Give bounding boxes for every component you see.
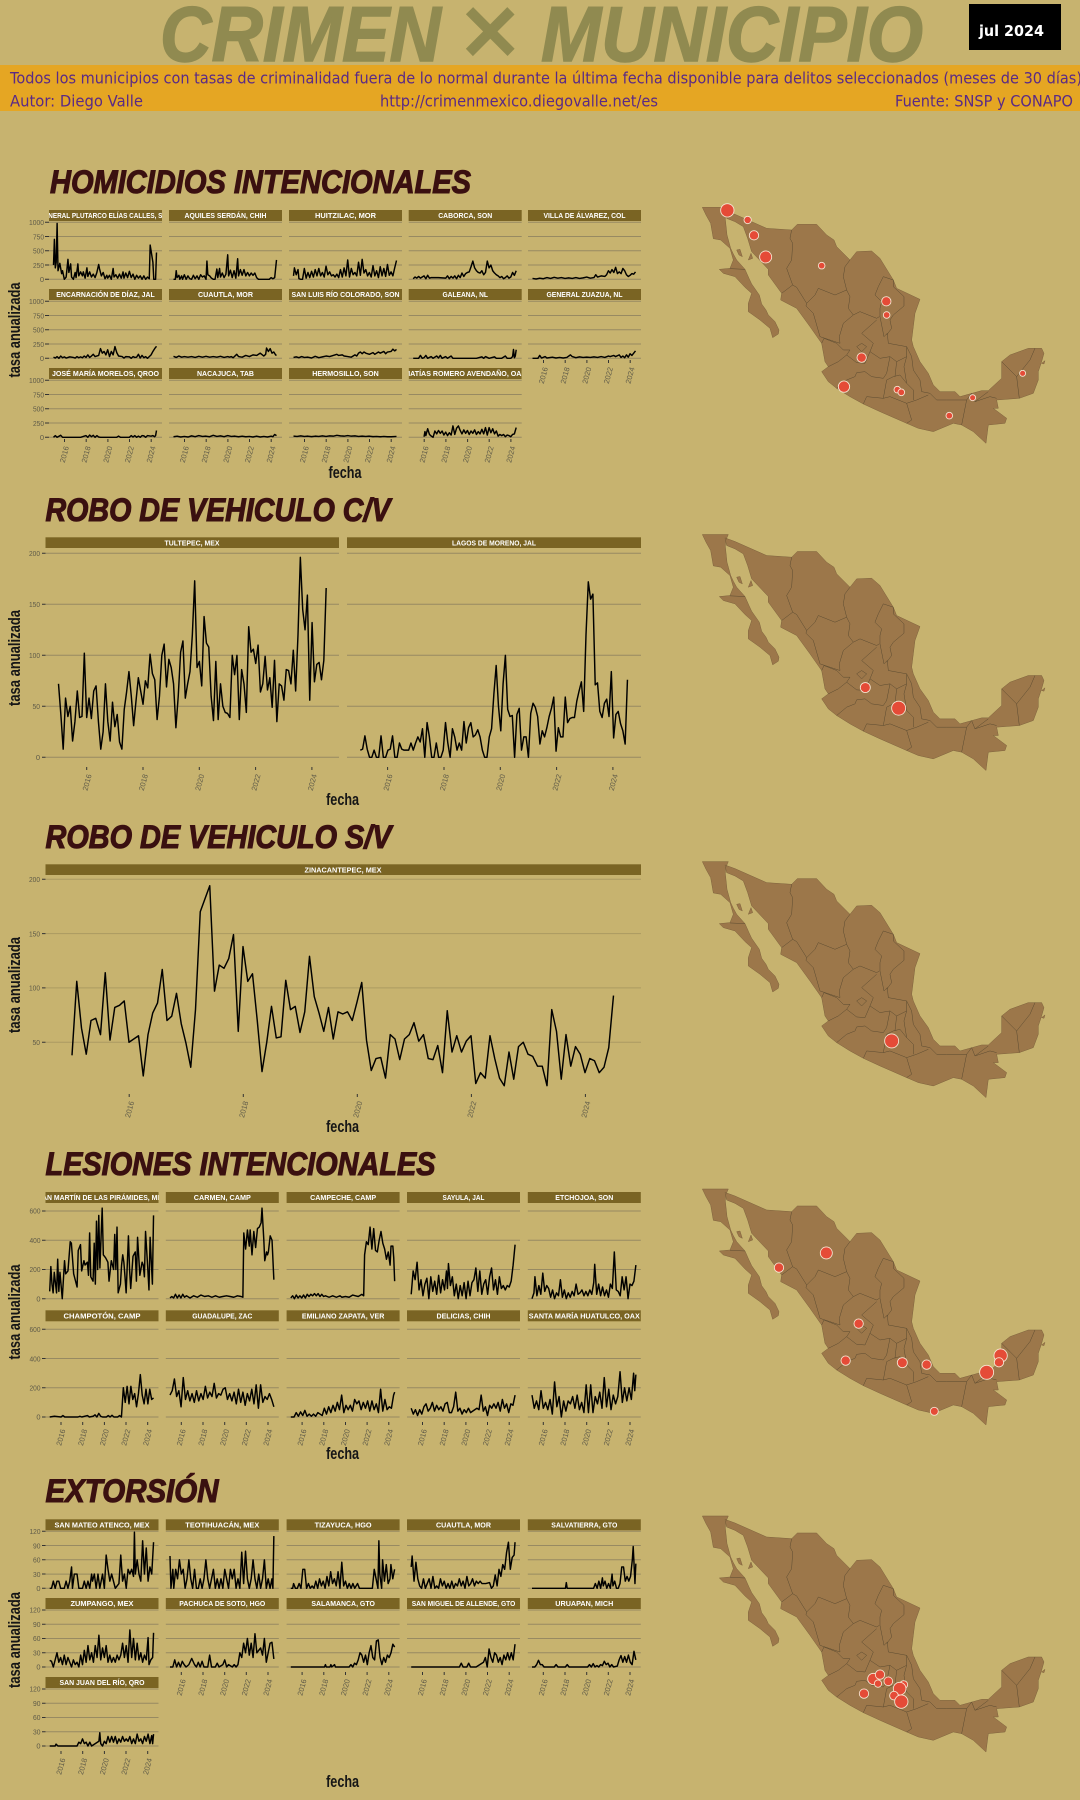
markers: [774, 1247, 1007, 1415]
panel: Galeana: [409, 289, 522, 358]
y axis title: tasa anualizada: [5, 610, 24, 706]
panel: San Luis Río Colorado: [289, 289, 402, 358]
panel: Lagos de Moreno: LAGOS DE MORENO, JAL: [452, 538, 536, 548]
y axis: 150: [29, 600, 40, 609]
panel: Guadalupe: [166, 1310, 279, 1417]
panel: Pachuca de Soto: PACHUCA DE SOTO, HGO: [179, 1599, 265, 1608]
panel: Cuautla extorsión: [407, 1519, 520, 1588]
panel: Zumpango: ZUMPANGO, MEX: [70, 1599, 134, 1608]
panel: Emiliano Zapata: [287, 1310, 400, 1417]
url: http://crimenmexico.diegovalle.net/es: [380, 92, 658, 110]
y axes: [30, 1527, 46, 1751]
panel: San Juan del Río: SAN JUAN DEL RÍO, QRO: [60, 1678, 145, 1687]
x axes: 2022: [250, 773, 263, 792]
x axis: 2024: [579, 1100, 592, 1119]
x axes: [54, 1672, 636, 1776]
date badge: [969, 4, 1061, 50]
panel: Zumpango: [46, 1598, 158, 1667]
x axis title: fecha: [326, 1444, 359, 1463]
panel: Villa de Álvarez: VILLA DE ÁLVAREZ, COL: [544, 211, 626, 220]
title: [160, 0, 923, 87]
panel: Villa de Álvarez: [528, 210, 641, 279]
y axis: 50: [32, 1038, 40, 1047]
panel: San Mateo Atenco: [46, 1519, 158, 1588]
line: [72, 886, 614, 1086]
y axis title: tasa anualizada: [5, 282, 24, 378]
panel: San Mateo Atenco: SAN MATEO ATENCO, MEX: [54, 1520, 150, 1529]
panel: Encarnación de Díaz: ENCARNACIÓN DE DÍAZ, JAL: [56, 290, 155, 299]
x axis: 2020: [351, 1100, 364, 1119]
map: extorsion: [702, 1516, 1045, 1752]
x axis title: fecha: [326, 1772, 359, 1791]
x axis: 2016: [123, 1100, 136, 1119]
section: homicidios: [5, 164, 641, 482]
panel: Zinacantepec: ZINACANTEPEC, MEX: [304, 866, 382, 874]
panel: Salvatierra: SALVATIERRA, GTO: [551, 1520, 617, 1529]
x axes: 2018: [137, 773, 150, 792]
heading: ROBO DE VEHICULO S/V: [46, 819, 394, 855]
panel: Hermosillo: HERMOSILLO, SON: [312, 369, 379, 378]
markers: [721, 204, 1026, 419]
panel: Champotón: [46, 1310, 158, 1417]
y axis title: tasa anualizada: [5, 1592, 24, 1688]
y axis title: tasa anualizada: [5, 937, 24, 1033]
x axes: 2020: [494, 773, 507, 792]
panel: Aquiles Serdán: AQUILES SERDÁN, CHIH: [184, 211, 266, 220]
heading: ROBO DE VEHICULO C/V: [46, 492, 393, 528]
panel: Campeche: [287, 1192, 400, 1299]
x axis title: fecha: [328, 463, 362, 482]
panel: San Luis Río Colorado: SAN LUIS RÍO COLORADO, SON: [292, 290, 400, 299]
panel: Delicias: DELICIAS, CHIH: [436, 1311, 490, 1320]
panel: San Miguel de Allende: [407, 1598, 520, 1667]
y axis: 200: [29, 875, 40, 884]
panel: General Plutarco Elías Calles: [39, 210, 172, 279]
panel: San Martín de las Pirámides: [38, 1192, 166, 1299]
y axes: [30, 1207, 46, 1422]
x axis: 2022: [465, 1100, 478, 1119]
heading: HOMICIDIOS INTENCIONALES: [50, 164, 472, 200]
panel: Tultepec: TULTEPEC, MEX: [164, 538, 220, 548]
panel: Delicias: [407, 1310, 520, 1417]
panel: Sayula: [407, 1192, 520, 1299]
panel: Uruapan: [528, 1598, 641, 1667]
author: Autor: Diego Valle: [10, 92, 143, 110]
x axes: 2022: [551, 773, 564, 792]
panel: Zinacantepec: [46, 864, 641, 1086]
section: lesiones: [5, 1146, 641, 1463]
y axis: 200: [29, 549, 40, 558]
x axes: [58, 360, 637, 464]
panel: Carmen: [166, 1192, 279, 1299]
panel: Caborca: CABORCA, SON: [438, 211, 492, 220]
heading: EXTORSIÓN: [46, 1473, 219, 1509]
y axis: [29, 875, 46, 1047]
panel: Nacajuca: NACAJUCA, TAB: [197, 369, 255, 378]
panel: Tizayuca: [287, 1519, 400, 1588]
marker: [885, 1034, 899, 1048]
date badge: jul 2024: [978, 22, 1044, 40]
panel: Cuautla homicidios: [169, 289, 282, 358]
y axis: [29, 549, 46, 762]
map: homicidios: [702, 204, 1045, 443]
panel: Matías Romero Avendaño: [404, 368, 526, 437]
header band: [0, 65, 1080, 111]
y axis: 100: [29, 984, 40, 993]
panel: Lagos de Moreno: [347, 537, 641, 757]
panel: Teotihuacán: [166, 1519, 279, 1588]
x axes: [81, 767, 620, 792]
y axis: 50: [32, 702, 40, 711]
markers: [859, 1670, 908, 1708]
panel: Tultepec: [46, 537, 339, 757]
x axis: [123, 1094, 592, 1119]
y axis: 150: [29, 929, 40, 938]
panel: General Zuazua: GENERAL ZUAZUA, NL: [546, 290, 623, 299]
panel: Pachuca de Soto: [166, 1598, 279, 1667]
panel: Huitzilac: HUITZILAC, MOR: [315, 211, 377, 220]
panel: Etchojoa: [528, 1192, 641, 1299]
panel: Salvatierra: [528, 1519, 641, 1588]
panel: San Miguel de Allende: SAN MIGUEL DE ALLENDE, GTO: [412, 1599, 515, 1608]
section: robo de vehiculo c/v: [5, 492, 641, 809]
x axes: 2020: [193, 773, 206, 792]
panel: Santa María Huatulco: [528, 1310, 641, 1417]
x axes: 2016: [81, 773, 94, 792]
x axis title: fecha: [326, 1117, 359, 1136]
section: robo de vehiculo s/v: [5, 819, 641, 1136]
panel: José María Morelos: [49, 368, 162, 437]
panel: José María Morelos: JOSÉ MARÍA MORELOS, QROO: [52, 369, 159, 378]
line: [58, 557, 326, 749]
panel: Campeche: CAMPECHE, CAMP: [310, 1193, 376, 1202]
panel: Uruapan: URUAPAN, MICH: [555, 1599, 613, 1608]
panel: Teotihuacán: TEOTIHUACÁN, MEX: [185, 1520, 259, 1529]
map: robo c/v: [702, 535, 1045, 771]
panel: Aquiles Serdán: [169, 210, 282, 279]
y axis: 100: [29, 651, 40, 660]
panel: San Juan del Río: [46, 1677, 158, 1746]
panel: Santa María Huatulco: SANTA MARÍA HUATULCO, OAX: [529, 1311, 640, 1320]
panel: Etchojoa: ETCHOJOA, SON: [555, 1193, 613, 1202]
panel: Caborca: [409, 210, 522, 279]
panel: Cuautla homicidios: CUAUTLA, MOR: [198, 290, 254, 299]
panel: Salamanca: SALAMANCA, GTO: [311, 1599, 375, 1608]
heading: LESIONES INTENCIONALES: [46, 1146, 436, 1182]
panel: Champotón: CHAMPOTÓN, CAMP: [64, 1311, 140, 1320]
x axes: 2018: [438, 773, 451, 792]
y axis: 0: [36, 753, 40, 762]
panel: Galeana: GALEANA, NL: [442, 290, 488, 299]
map: robo s/v: [702, 862, 1045, 1098]
x axes: [54, 1422, 636, 1447]
x axes: 2016: [382, 773, 395, 792]
panel: Hermosillo: [289, 368, 402, 437]
panel: Carmen: CARMEN, CAMP: [194, 1193, 251, 1202]
x axes: 2024: [607, 773, 620, 792]
map: lesiones: [702, 1189, 1045, 1425]
panel: Tizayuca: TIZAYUCA, HGO: [315, 1520, 372, 1529]
line: [360, 582, 627, 757]
panel: Sayula: SAYULA, JAL: [442, 1193, 485, 1202]
y axis title: tasa anualizada: [5, 1264, 24, 1360]
x axis title: fecha: [326, 790, 359, 809]
panel: Huitzilac: [289, 210, 402, 279]
panel: Cuautla extorsión: CUAUTLA, MOR: [436, 1520, 492, 1529]
y axes: [29, 218, 49, 442]
panel: Emiliano Zapata: EMILIANO ZAPATA, VER: [302, 1311, 385, 1320]
panel: Nacajuca: [169, 368, 282, 437]
x axes: 2024: [306, 773, 319, 792]
panel: Salamanca: [287, 1598, 400, 1667]
panel: Guadalupe: GUADALUPE, ZAC: [192, 1311, 253, 1320]
markers: [860, 683, 906, 715]
x axis: 2018: [237, 1100, 250, 1119]
panel: General Zuazua: [528, 289, 641, 358]
section: extorsion: [5, 1473, 641, 1791]
panel: Encarnación de Díaz: [49, 289, 162, 358]
